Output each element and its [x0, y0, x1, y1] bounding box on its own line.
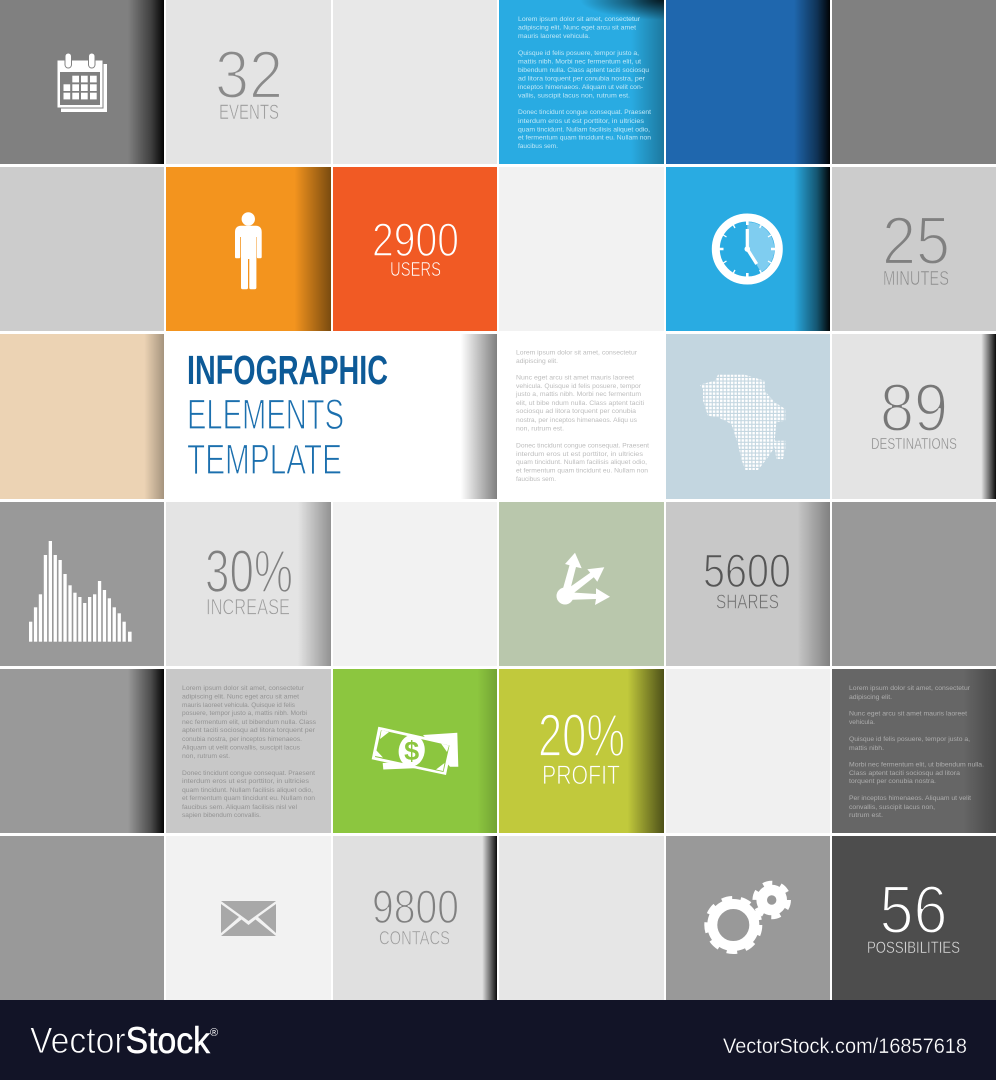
text block: dark tile copy: torquent per conubia nostra. [849, 778, 936, 785]
stat: 56: 56 [880, 872, 948, 948]
label: increase: INCREASE [206, 594, 290, 620]
text block: white tile copy: quam tincidunt. Nullam facilisis aliquet odio, [516, 459, 647, 466]
panel: dark blue tile [666, 0, 830, 164]
icon: gears [708, 884, 788, 950]
text block: gray tile copy [182, 685, 317, 819]
text block: dark tile copy: vehicula. [849, 719, 875, 726]
text block: blue tile copy: interdum eros ut est porttitor, in ultricies [518, 118, 645, 125]
text block: white tile copy: Donec tincidunt congue consequat. Praesent [516, 442, 649, 450]
panel: bar chart tile [0, 502, 164, 666]
panel: gray shaded tile [0, 669, 164, 833]
text block: dark tile copy: Lorem ipsum dolor sit amet, consectetur [849, 685, 971, 692]
text block: gray tile copy: nec fermentum elit, ut bibendum nulla. Class [182, 719, 317, 726]
panel: blue clock tile [666, 167, 830, 331]
text block: dark tile copy: Quisque id felis posuere, tempor justo a, [849, 736, 970, 743]
panel: sage arrows tile [499, 502, 664, 666]
text block: white tile copy: interdum eros ut est porttitor, in ultricies [516, 451, 644, 458]
text block: white tile copy: justo a, mattis nibh. Morbi nec fermentum [515, 391, 642, 398]
text block: white tile copy: et fermentum quam tincidunt eu. Nullam non [516, 468, 648, 474]
footer bar [0, 1000, 996, 1080]
text block: blue tile copy: vallis, suscipit lacus non, rutrum est. [518, 92, 630, 99]
text block: gray tile copy: et fermentum quam tincidunt eu. Nullam non [182, 795, 315, 802]
text block: blue tile copy: quam tincidunt. Nullam facilisis aliquet odio, [518, 126, 650, 133]
stat: 9800: 9800 [372, 880, 459, 933]
panel: 5600 shares [666, 502, 830, 666]
panel: 56 possibilities [832, 836, 996, 1000]
panel: 32 events [166, 0, 331, 164]
stat: 5600: 5600 [703, 544, 791, 597]
panel: gray tile top right [832, 0, 996, 164]
label: destinations: DESTINATIONS [871, 436, 957, 453]
text block: gray tile copy: faucibus sem. Aliquam facilisis nisl vel [182, 804, 298, 811]
text block: dark tile copy: Morbi nec fermentum elit, ut bibendum nulla. [849, 762, 984, 768]
label: possibilities: POSSIBILITIES [867, 938, 960, 957]
panel: 20% profit [499, 669, 664, 833]
text block: dark tile copy: Nunc eget arcu sit amet mauris laoreet [849, 710, 967, 718]
icon: person [235, 212, 262, 289]
icon: dotted africa map [700, 375, 785, 470]
panel: empty pale tile [333, 502, 497, 666]
panel: empty light tile [333, 0, 497, 164]
text block: gray tile copy: mauris laoreet vehicula. Quisque id felis [182, 702, 296, 709]
stat: 89: 89 [880, 370, 948, 446]
label: shares: SHARES [716, 592, 779, 614]
text block: white tile copy: vehicula. Quisque id felis posuere, tempor [516, 383, 642, 390]
text block: blue tile copy: faucibus sem. [518, 143, 558, 150]
text block: blue tile copy [518, 16, 651, 150]
stat: 30%: 30% [205, 538, 293, 605]
text block: gray tile copy: Donec tincidunt congue consequat. Praesent [182, 770, 315, 777]
icon: envelope [221, 901, 276, 936]
panel: gray tile bottom left [0, 836, 164, 1000]
panel: tan tile [0, 334, 164, 499]
panel: green money tile [333, 669, 497, 833]
text block: gray tile copy: quam tincidunt. Nullam facilisis aliquet odio, [182, 787, 313, 794]
text block: blue tile copy: mattis nibh. Morbi nec fermentum elit, ut [518, 58, 641, 65]
panel: 30% increase [166, 502, 331, 666]
text block: white tile copy: nostra, per inceptos himenaeos. Aliqu us [516, 417, 638, 424]
panel: light gray tile [0, 167, 164, 331]
panel: 2900 users [333, 167, 497, 331]
panel: dark text tile [832, 669, 996, 833]
text block: dark tile copy: mattis nibh. [849, 745, 884, 752]
text block: blue tile copy: Lorem ipsum dolor sit amet, consectetur [518, 16, 641, 23]
label: profit: PROFIT [542, 760, 620, 790]
text block: blue tile copy: Quisque id felis posuere, tempor justo a, [518, 50, 639, 57]
text block: gray tile copy: conubia nostra, per inceptos himenaeos. [182, 736, 302, 743]
text block: gray tile copy: interdum eros ut est porttitor, in ultricies [182, 778, 310, 785]
text block: white tile copy [515, 350, 649, 483]
text block: blue tile copy: ad litora torquent per conubia nostra, per [518, 75, 646, 82]
text block: gray tile copy: non, rutrum est. [182, 753, 230, 760]
text block: dark tile copy: convallis, suscipit lacus non, [849, 804, 935, 811]
stat: 25: 25 [882, 203, 950, 279]
panel: 89 destinations [832, 334, 996, 499]
text block: white tile copy: faucibus sem. [516, 476, 556, 483]
panel: orange person tile [166, 167, 331, 331]
text block: blue tile copy: mauris laoreet vehicula. [518, 33, 590, 40]
panel: gray text tile [166, 669, 331, 833]
label: minutes: MINUTES [883, 268, 949, 290]
stat: 2900: 2900 [372, 213, 459, 266]
text block: gray tile copy: sapien bibendum convallis. [182, 812, 261, 819]
heading: elements: ELEMENTS [187, 391, 344, 439]
label: events: EVENTS [219, 101, 279, 124]
text block: gray tile copy: adipiscing elit. Nunc eget arcu sit amet [182, 694, 299, 700]
label: users: USERS [390, 259, 441, 281]
panel: empty tile [499, 836, 664, 1000]
stat: 32: 32 [215, 37, 283, 113]
text block: gray tile copy: posuere, tempor justo a, mattis nibh. Morbi [182, 710, 308, 717]
text block: white tile copy: Lorem ipsum dolor sit amet, consectetur [516, 350, 638, 356]
text block: dark tile copy: Class aptent taciti sociosqu ad litora [849, 770, 960, 777]
panel: empty pale tile [499, 167, 664, 331]
icon: clock [716, 218, 779, 280]
panel: 9800 contacts [333, 836, 497, 1000]
icon: diverging arrows [556, 553, 610, 605]
panel: africa map tile [666, 334, 830, 499]
panel: gray tile [832, 502, 996, 666]
text block: gray tile copy: Aliquam ut velit convallis, suscipit lacus [182, 744, 301, 752]
text block: dark tile copy: Per inceptos himenaeos. Aliquam ut velit [849, 795, 971, 802]
panel: title [166, 334, 497, 499]
text block: blue tile copy: Donec tincidunt congue consequat. Praesent [518, 109, 651, 116]
registered mark: ® [210, 1027, 218, 1039]
text block: dark tile copy: adipiscing elit. [849, 694, 892, 701]
text block: gray tile copy: Lorem ipsum dolor sit amet, consectetur [182, 685, 305, 692]
panel: envelope tile [166, 836, 331, 1000]
text block: white tile copy: elit, ut bibe ndum nulla. Class aptent taciti [516, 400, 645, 407]
bar chart [29, 541, 132, 642]
text block: blue tile copy: adipiscing elit. Nunc eget arcu sit amet [518, 24, 636, 31]
label: contacs: CONTACS [379, 928, 450, 950]
panel: empty pale tile [666, 669, 830, 833]
text block: white tile copy: sociosqu ad litora torquent per conubia [516, 408, 636, 415]
heading: template: TEMPLATE [187, 436, 342, 484]
text block: white tile copy: Nunc eget arcu sit amet mauris laoreet [516, 374, 634, 382]
text block: blue tile copy: et fermentum quam tincidunt eu. Nullam non [518, 134, 651, 141]
panel: calendar tile [0, 0, 164, 164]
icon: banknotes: $ [404, 736, 419, 766]
panel: gears tile [666, 836, 830, 1000]
icon: calendar [57, 53, 107, 112]
panel: white text tile [499, 334, 664, 499]
text block: dark tile copy [849, 685, 984, 819]
footer image id: VectorStock.com/16857618 [723, 1035, 967, 1058]
panel: 25 minutes [832, 167, 996, 331]
text block: gray tile copy: aptent taciti sociosqu ad litora torquent per [182, 727, 316, 734]
stat: 20%: 20% [538, 702, 625, 769]
text block: dark tile copy: rutrum est. [849, 812, 883, 819]
footer logo: VectorStock [30, 1020, 210, 1061]
text block: white tile copy: adipiscing elit. [516, 358, 558, 365]
text block: blue tile copy: bibendum nulla. Class aptent taciti sociosqu [518, 67, 649, 74]
text block: white tile copy: non, rutrum est. [516, 426, 564, 432]
panel: blue text tile [499, 0, 664, 164]
text block: blue tile copy: inceptos himenaeos. Aliquam ut velit con- [518, 84, 643, 91]
icon: banknotes [372, 727, 458, 775]
heading: infographic: INFOGRAPHIC [187, 347, 388, 393]
